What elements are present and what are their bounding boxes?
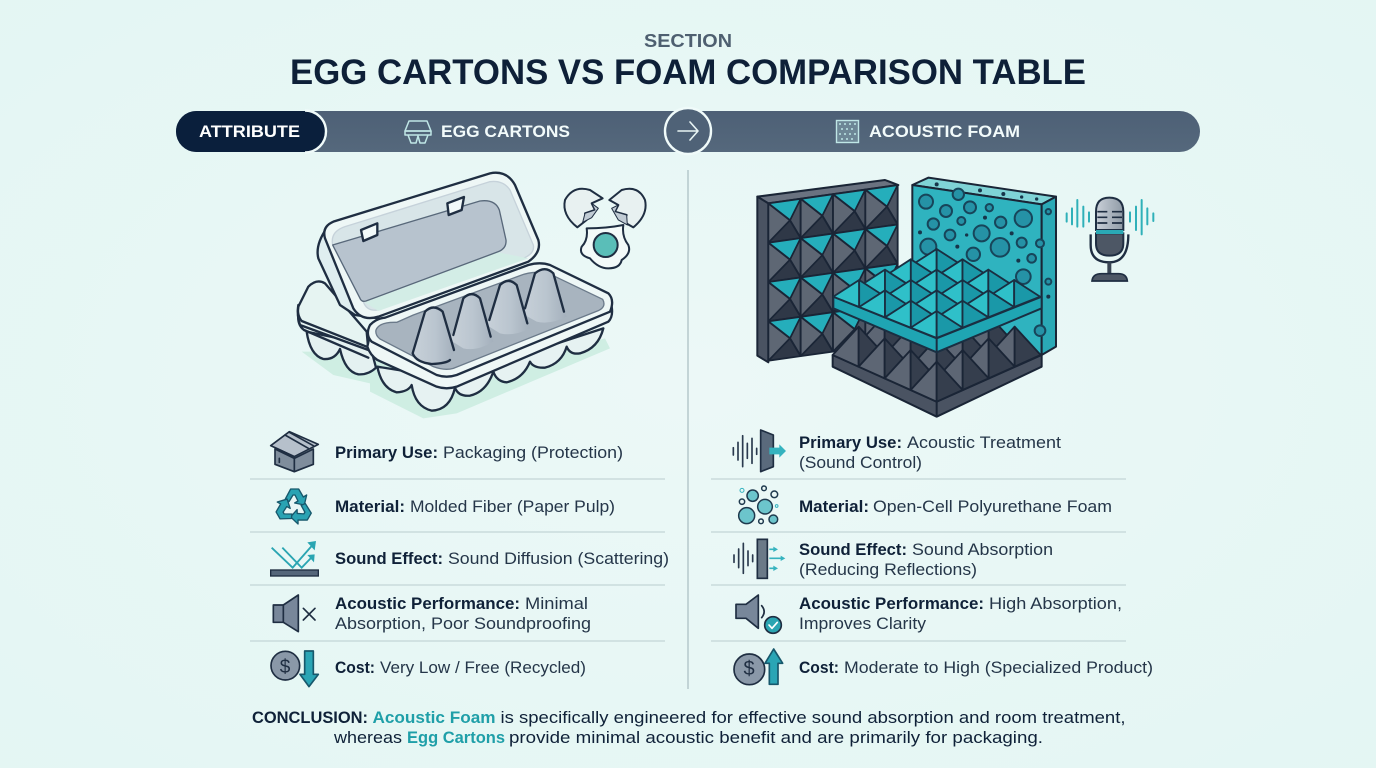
- icon: cost down: [271, 651, 318, 687]
- dark pyramid wall: [757, 180, 898, 362]
- header bar: [176, 108, 1200, 154]
- row: acoustic performance: Improves Clarity: [799, 614, 927, 633]
- teal pyramid pad: [833, 249, 1042, 352]
- row: material: Material:: [335, 497, 405, 516]
- title: EGG CARTONS VS FOAM COMPARISON TABLE: [290, 53, 1086, 92]
- icon: cracked egg: [564, 189, 646, 268]
- row: primary use: [799, 433, 1061, 472]
- panel: acoustic foam attributes: [733, 430, 1153, 685]
- teal foam panel: [912, 178, 1056, 355]
- icon: cost down: $: [280, 657, 291, 678]
- cone 1: [413, 307, 454, 364]
- row: acoustic performance: Minimal: [525, 594, 588, 613]
- row: primary use: [335, 443, 623, 462]
- row: acoustic performance: [799, 594, 1122, 633]
- conclusion: CONCLUSION:: [252, 708, 368, 727]
- conclusion: Egg Cartons: [407, 728, 505, 747]
- back carton: [298, 281, 376, 374]
- row: acoustic performance: Acoustic Performance:: [799, 594, 984, 613]
- illustration: acoustic foam: [757, 178, 1153, 417]
- cone 2: [450, 294, 493, 349]
- row: primary use: Packaging (Protection): [443, 443, 623, 462]
- row: acoustic performance: Acoustic Performance:: [335, 594, 520, 613]
- row: acoustic performance: [335, 594, 591, 633]
- cone 4: [522, 269, 567, 323]
- row: cost: Very Low / Free (Recycled): [380, 658, 586, 677]
- row: cost: Cost:: [335, 658, 375, 677]
- row: sound effect: Sound Diffusion (Scattering): [448, 549, 669, 568]
- label: egg cartons: EGG CARTONS: [441, 122, 570, 141]
- divider lines: [250, 479, 1126, 641]
- conclusion: provide minimal acoustic benefit and are primarily for packaging.: [509, 728, 1043, 747]
- row: primary use: Primary Use:: [799, 433, 902, 452]
- lid: [318, 173, 539, 318]
- row: sound effect: (Reducing Reflections): [799, 560, 977, 579]
- shadow: [302, 338, 610, 418]
- row: material: Open-Cell Polyurethane Foam: [873, 497, 1112, 516]
- conclusion: whereas: [333, 728, 402, 747]
- tray: [367, 263, 612, 411]
- icon: open box: [271, 432, 318, 472]
- row: primary use: (Sound Control): [799, 453, 922, 472]
- column divider: [687, 170, 689, 689]
- icon: muted speaker: [273, 595, 315, 632]
- conclusion: [252, 708, 1126, 747]
- dark pyramid pad: [833, 292, 1042, 417]
- icon: egg carton header: [405, 121, 431, 143]
- icon: sound panel: [733, 430, 786, 472]
- row: sound effect: Sound Effect:: [335, 549, 443, 568]
- row: cost: Cost:: [799, 658, 839, 677]
- row: sound effect: [335, 549, 669, 568]
- icon: recycle: [272, 489, 314, 527]
- row: sound effect: [799, 540, 1053, 579]
- icon: absorption: [734, 539, 785, 578]
- panel: egg carton attributes: [271, 432, 669, 687]
- cone 3: [487, 281, 530, 334]
- icon: speaker check: [736, 595, 781, 633]
- row: sound effect: Sound Absorption: [912, 540, 1053, 559]
- attribute pill: ATTRIBUTE: [199, 122, 300, 141]
- illustration: egg cartons: [298, 173, 646, 418]
- egg cups: [413, 269, 567, 364]
- row: primary use: Acoustic Treatment: [907, 433, 1061, 452]
- arrow badge: [665, 108, 711, 154]
- icon: foam header: [836, 120, 858, 142]
- row: acoustic performance: High Absorption,: [989, 594, 1122, 613]
- row: primary use: Primary Use:: [335, 443, 438, 462]
- icon: diffusion: [271, 541, 318, 576]
- conclusion: Acoustic Foam: [372, 708, 496, 727]
- label: acoustic foam: ACOUSTIC FOAM: [869, 122, 1020, 141]
- row: acoustic performance: Absorption, Poor Soundproofing: [335, 614, 591, 633]
- row: material: Material:: [799, 497, 869, 516]
- conclusion: is specifically engineered for effective sound absorption and room treatment,: [500, 708, 1126, 727]
- icon: cost up: [734, 649, 783, 685]
- attribute pill: [176, 110, 326, 152]
- icon: cost up: $: [743, 658, 755, 680]
- row: cost: Moderate to High (Specialized Product): [844, 658, 1153, 677]
- row: material: Molded Fiber (Paper Pulp): [410, 497, 615, 516]
- row: sound effect: Sound Effect:: [799, 540, 907, 559]
- section label: SECTION: [644, 31, 732, 51]
- icon: bubbles: [739, 486, 778, 524]
- icon: microphone: [1067, 198, 1153, 281]
